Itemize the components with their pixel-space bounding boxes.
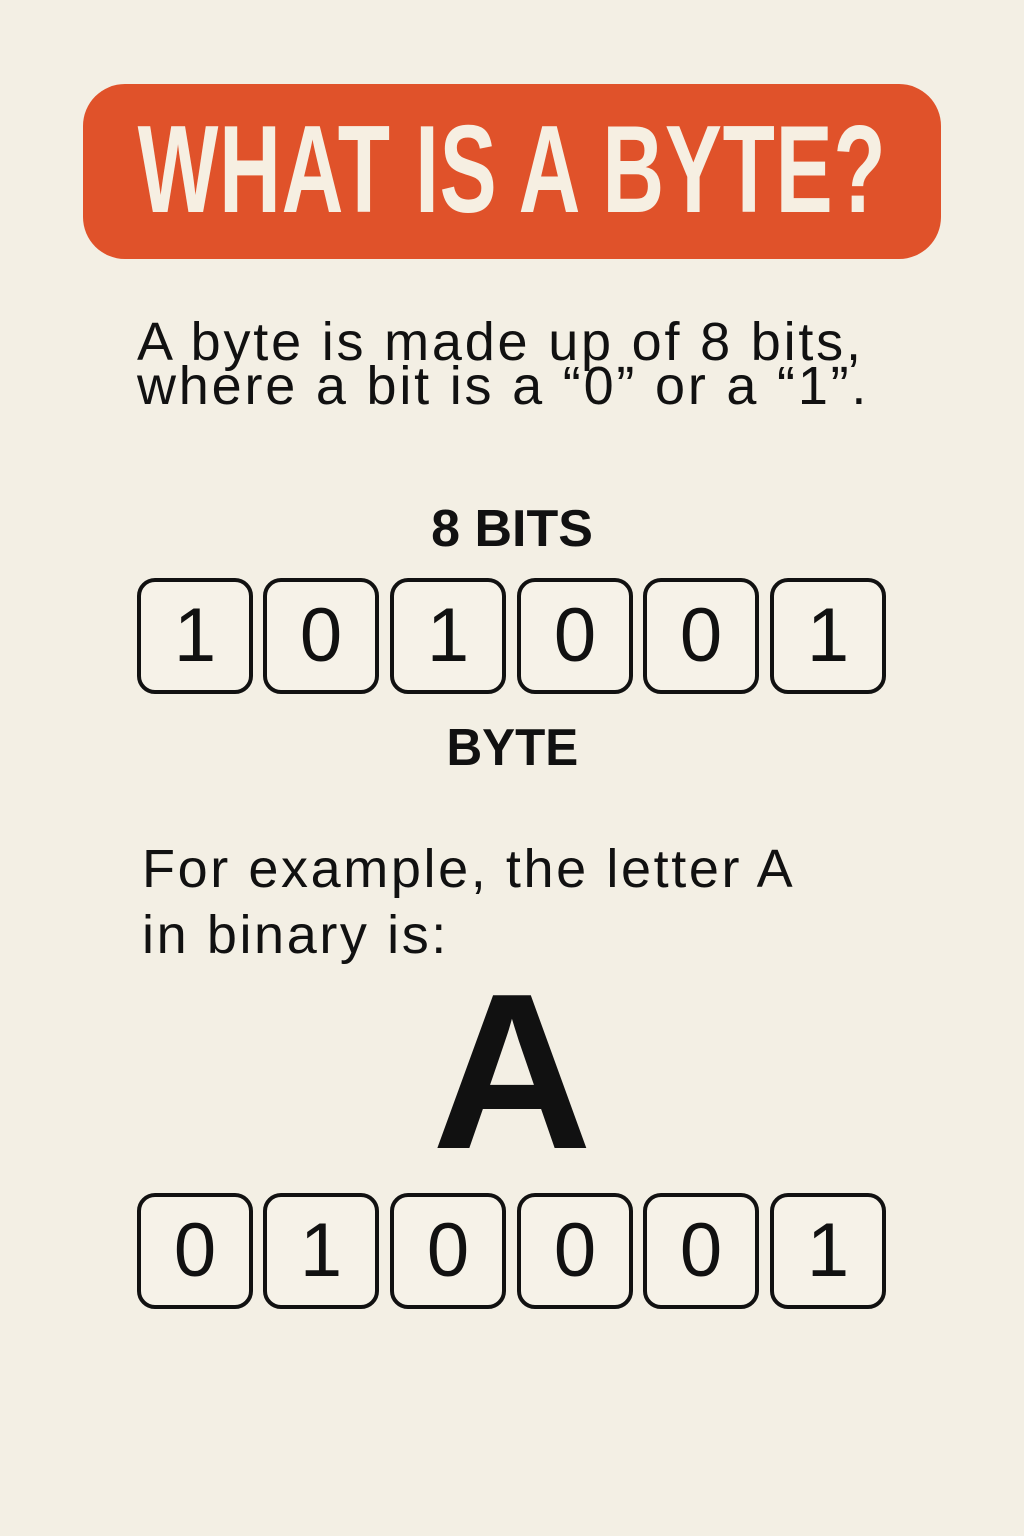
label: byte: BYTE <box>446 719 578 777</box>
intro text <box>136 312 869 416</box>
bit row 1: 0 <box>680 593 722 678</box>
bit row 1 <box>137 578 886 694</box>
big letter A: A <box>432 948 592 1196</box>
bit row 1: 0 <box>554 593 596 678</box>
intro text: where a bit is a “0” or a “1”. <box>137 356 869 416</box>
bit row 2 <box>137 1193 886 1309</box>
bit row 2: 0 <box>427 1208 469 1293</box>
example text <box>142 839 795 965</box>
intro text: A byte is made up of 8 bits, <box>137 312 864 372</box>
title <box>83 84 941 259</box>
label: 8 bits: 8 BITS <box>431 500 593 558</box>
bit row 1: 1 <box>174 593 216 678</box>
bit row 2: 1 <box>300 1208 342 1293</box>
example text: in binary is: <box>142 905 449 965</box>
bit row 1: 1 <box>427 593 469 678</box>
bit row 2: 0 <box>554 1208 596 1293</box>
bit row 1: 0 <box>300 593 342 678</box>
example text: For example, the letter A <box>142 839 795 899</box>
bit row 2: 1 <box>807 1208 849 1293</box>
bit row 1: 1 <box>807 593 849 678</box>
title: WHAT IS A BYTE? <box>138 101 886 239</box>
bit row 2: 0 <box>174 1208 216 1293</box>
bit row 2: 0 <box>680 1208 722 1293</box>
